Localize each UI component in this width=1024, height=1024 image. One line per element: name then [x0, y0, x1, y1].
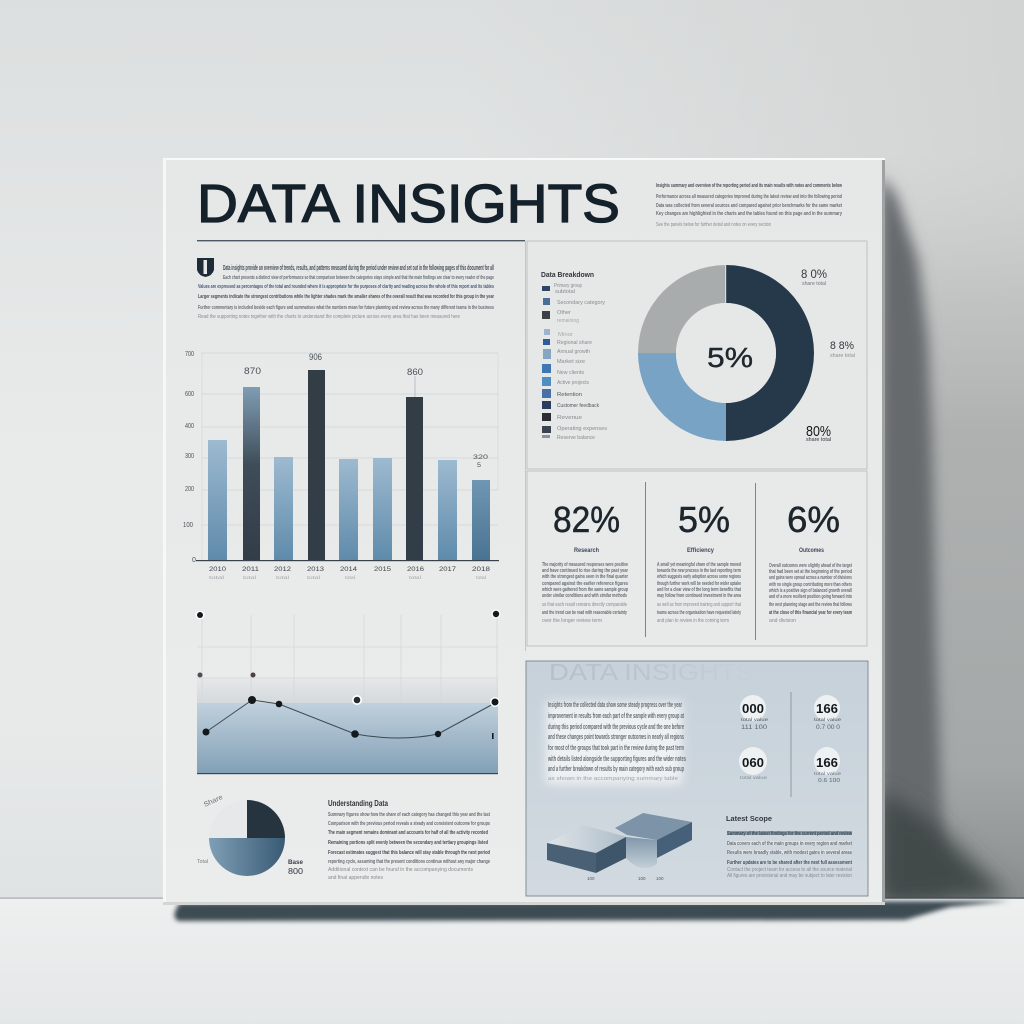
bar chart: total [276, 575, 289, 580]
x axis labels [209, 566, 490, 573]
paragraph: with details listed alongside the supporting figures and the wider notes [547, 756, 686, 763]
side note heading: Latest Scope [726, 814, 772, 823]
header note text: Data was collected from several sources and compared against prior benchmarks for the same market [656, 203, 842, 209]
side note lines: All figures are provisional and may be subject to later revision [727, 873, 852, 879]
small pie chart: 800 [288, 867, 304, 876]
stat: 5% [656, 499, 742, 624]
ghost heading: DATA INSIGHTS [549, 659, 754, 685]
stat: 6%: and of a more resilient position going forward into [769, 594, 852, 600]
intro paragraph: Values are expressed as percentages of the total and rounded where it is appropriate for the purposes of clarity and reading across the whole of this report and its tables [198, 284, 494, 290]
stat: 6%: Outcomes [799, 548, 825, 554]
stat: 82%: and the trend can be read with reasonable certainty [542, 610, 628, 616]
donut callouts: share total [806, 437, 831, 443]
stat: 6%: and gains were spread across a number of divisions [769, 575, 852, 581]
intro paragraph: Read the supporting notes together with the charts to understand the complete picture across every area that has been measured here [198, 314, 460, 320]
stat: 6%: at the close of this financial year for every team [769, 610, 852, 616]
intro paragraph: Further commentary is included beside each figure and summarises what the numbers mean for future planning and review across the many different teams in the business [198, 305, 494, 311]
donut callouts: share total [802, 281, 826, 287]
side note lines [727, 831, 852, 879]
stat: 6%: the next planning stage and the review that follows [769, 602, 852, 608]
legend: Data Breakdown [541, 270, 594, 279]
side note lines: Results were broadly stable, with modest gains in several areas [727, 850, 852, 856]
section divider [525, 241, 526, 651]
legend: Market size [557, 359, 585, 365]
y axis labels: 600 [185, 391, 194, 398]
bar chart: total [209, 575, 224, 580]
y axis labels [183, 351, 196, 564]
metric: bottom right [814, 747, 842, 784]
bar value labels: 860 [407, 367, 423, 377]
side note lines: Summary of the latest findings for the current period and review [727, 831, 852, 837]
small pie chart: Total [197, 859, 208, 865]
donut callouts: 8 0% [801, 267, 827, 281]
legend: Annual growth [557, 349, 590, 355]
legend: Operating expenses [557, 426, 608, 432]
stat: 5%: A small yet meaningful share of the sample moved [657, 562, 741, 568]
stat: 82% [541, 499, 629, 624]
legend: Minor [558, 332, 573, 338]
chart grid [201, 353, 498, 560]
legend: New clients [557, 370, 585, 376]
side note lines: Data covers each of the main groups in every region and market [727, 841, 852, 847]
stat: 6%: 6% [787, 499, 840, 540]
legend: Revenue [557, 415, 582, 421]
floor [0, 898, 1024, 1024]
legend: Secondary category [557, 300, 606, 306]
stat: 5%: though further work will be needed for wider uptake [657, 581, 741, 587]
metric: top right: 0.7 00 0 [816, 725, 841, 731]
stat: 6%: and division [769, 618, 796, 624]
paragraph: Insights from the collected data show some steady progress over the year [548, 702, 682, 709]
metric: bottom left: 060 [742, 755, 764, 770]
bar chart: total [476, 575, 486, 580]
donut callouts: share total [830, 353, 855, 359]
stat: 6% [768, 499, 852, 624]
legend: Primary group [554, 283, 582, 289]
pie labels: Share [203, 794, 224, 809]
data points [196, 610, 500, 739]
donut callouts: 8 8% [830, 340, 854, 352]
metric: bottom right: 0.6 100 [818, 778, 840, 784]
metric: top right: total value [814, 717, 842, 722]
x axis labels: 2016 [407, 566, 424, 573]
metric: top left: 000 [742, 701, 764, 716]
legend: Regional share [557, 340, 592, 346]
metric: top left [740, 695, 769, 731]
text: Data insights provide an overview of trends, results, and patterns measured during the period under review and set out in the following pages of this document for all [223, 265, 494, 272]
bar value labels [244, 352, 489, 469]
small pie chart [197, 794, 304, 876]
legend: remaining [557, 318, 579, 324]
donut segments [726, 265, 814, 441]
y axis labels: 100 [183, 522, 193, 529]
paragraph: as shown in the accompanying summary table [548, 776, 678, 782]
stat: 5%: and for a clear view of the long term benefits that [657, 587, 741, 593]
stat: 82%: 82% [553, 499, 620, 540]
bottom left text block: reporting cycle, assuming that the present conditions continue without any major change [328, 859, 490, 865]
chart grid [197, 615, 498, 703]
wall shadow cast by the board [880, 175, 1010, 905]
bar value labels: 320 [473, 455, 489, 461]
bar chart: total [243, 575, 256, 580]
y axis labels: 200 [185, 486, 194, 493]
x axis labels: 2010 [209, 566, 226, 573]
legend: Active projects [557, 380, 589, 386]
y axis labels: 400 [185, 423, 194, 430]
stat: 5%: towards the new process in the last reporting term [657, 568, 741, 574]
header note text [656, 183, 843, 228]
panel: intro text [197, 258, 495, 320]
stat: 5%: 5% [678, 499, 730, 540]
header note text: See the panels below for further detail and notes on every section [656, 222, 771, 228]
stat: 82%: with the strongest gains seen in the final quarter [541, 574, 629, 580]
header note text: Performance across all measured categories improved during the latest review and into the following period [656, 194, 842, 200]
metric: top right: 166 [816, 701, 838, 716]
stat: 6%: that had been set at the beginning of the period [769, 569, 852, 575]
legend: Reserve balance [557, 435, 595, 441]
3D block chart: 100 [638, 876, 646, 881]
header divider [197, 240, 525, 241]
stat: 82%: Research [574, 548, 599, 554]
baseline [196, 560, 499, 561]
metric: top left: total value [741, 717, 769, 722]
3D block chart: 100 [587, 876, 595, 881]
trend line [206, 700, 495, 738]
small pie chart: Base [288, 860, 304, 866]
area fill [197, 703, 498, 773]
y axis labels: 700 [185, 351, 194, 358]
bars [208, 440, 227, 560]
donut centre value: 5% [707, 342, 753, 373]
stat: 82%: and have continued to rise during the past year [542, 568, 629, 574]
bottom left text block: Summary figures show how the share of each category has changed this year and the last [328, 812, 490, 818]
legend [541, 270, 608, 441]
bar value labels: 5 [477, 463, 482, 469]
x axis labels: 2013 [307, 566, 324, 573]
bottom left text block: Comparison with the previous period reveals a steady and consistent outcome for groups [328, 821, 490, 827]
bar chart: total [345, 575, 355, 580]
paragraph: for most of the groups that took part in the review during the past term [548, 745, 684, 752]
bar chart: total [409, 575, 421, 580]
y axis labels: 300 [185, 453, 194, 460]
x axis labels: 2015 [374, 566, 391, 573]
header note text: Insights summary and overview of the reporting period and its main results with notes and comments below [656, 183, 842, 189]
paragraph: and these changes point towards stronger outcomes in nearly all regions [548, 734, 684, 741]
panel: donut chart [527, 241, 867, 469]
x axis labels: 2017 [439, 566, 456, 573]
title: DATA INSIGHTS [197, 174, 620, 234]
bar chart: total [307, 575, 320, 580]
3D block chart [547, 813, 692, 881]
stat: 5%: may follow from continued investment in the area [657, 593, 742, 599]
bar chart [183, 351, 499, 580]
bar value labels: 906 [309, 352, 322, 362]
paragraph [547, 702, 686, 782]
stat: 5%: Efficiency [687, 548, 715, 554]
legend: Retention [557, 392, 582, 398]
line and area chart [196, 610, 500, 774]
legend: Customer feedback [557, 403, 599, 409]
stat: 5%: which suggests early adoption across some regions [656, 574, 741, 580]
stat: 6%: Overall outcomes were slightly ahead of the target [769, 563, 852, 569]
intro paragraph: Each chart presents a distinct view of performance so that comparison between the categories stays simple and that the main findings are clear to every reader of the page [223, 275, 494, 281]
stat: 82%: so that each result remains directly comparable [542, 602, 627, 608]
x axis labels: 2012 [274, 566, 291, 573]
panel: data insights detail [526, 659, 868, 896]
3D block chart: 100 [656, 876, 664, 881]
bottom left text block: The main segment remains dominant and accounts for half of all the activity recorded [328, 830, 488, 836]
x axis labels: 2014 [340, 566, 357, 573]
bottom left text block: Forecast estimates suggest that this balance will stay stable through the next period [328, 850, 490, 856]
floor shadow [174, 901, 1010, 921]
bottom left text block [328, 799, 490, 881]
x axis labels: 2011 [242, 566, 259, 573]
bottom left text block: Additional context can be found in the accompanying documents [328, 867, 474, 873]
stat: 6%: with no single group contributing more than others [768, 582, 852, 588]
side note lines: Contact the project team for access to all the source material [727, 867, 852, 873]
stat: 82%: under similar conditions and with similar methods [542, 593, 627, 599]
paragraph: improvement in results from each part of the sample with every group at [548, 713, 684, 720]
metric: top left: 111 100 [741, 725, 768, 731]
legend: subtotal [555, 289, 575, 295]
legend: Other [557, 310, 571, 316]
intro paragraph: Larger segments indicate the strongest contributions while the lighter shades mark the smaller shares of the overall result that was recorded for this group in the year [198, 294, 495, 300]
stat: 82%: compared against the earlier reference figures [542, 581, 628, 587]
donut callouts [801, 267, 855, 443]
bottom left text block: Remaining portions split evenly between the secondary and tertiary groupings listed [328, 840, 488, 846]
metric: bottom left [739, 747, 768, 780]
bottom left text block: and final appendix notes [328, 875, 383, 881]
stat: 82%: over the longer review term [542, 618, 602, 624]
stat: 5%: as well as from improved training and support that [657, 602, 741, 608]
stat: 5%: and plan to review in the coming term [657, 618, 729, 624]
donut callouts: 80% [806, 423, 831, 440]
text glow [546, 702, 682, 784]
stat: 6%: which is a positive sign of balanced growth overall [768, 588, 852, 594]
panel: key statistics [527, 471, 867, 646]
intro paragraph [198, 265, 495, 320]
x axis labels: 2018 [472, 566, 490, 573]
stat: 82%: The majority of measured responses were positive [542, 562, 628, 568]
stat: 82%: which were gathered from the same sample group [541, 587, 628, 593]
side note lines: Further updates are to be shared after the next full assessment [727, 860, 852, 866]
stat: 5%: teams across the organisation have requested lately [657, 610, 742, 616]
icon: shield [197, 258, 214, 277]
metric: bottom right: total value [814, 771, 842, 776]
header note text: Key changes are highlighted in the charts and the tables found on this page and in the summary [656, 211, 843, 217]
paragraph: during this period compared with the previous cycle and the one before [548, 724, 684, 731]
metric: top right [814, 695, 842, 731]
y axis labels: 0 [192, 557, 196, 564]
metric: bottom right: 166 [816, 755, 838, 770]
bottom left text block: Understanding Data [328, 799, 388, 808]
board [163, 158, 885, 905]
bar value labels: 870 [244, 366, 261, 376]
metric: bottom left: total value [740, 775, 768, 780]
paragraph: and a further breakdown of results by main category with each sub group [548, 766, 684, 773]
metric divider [790, 692, 792, 797]
